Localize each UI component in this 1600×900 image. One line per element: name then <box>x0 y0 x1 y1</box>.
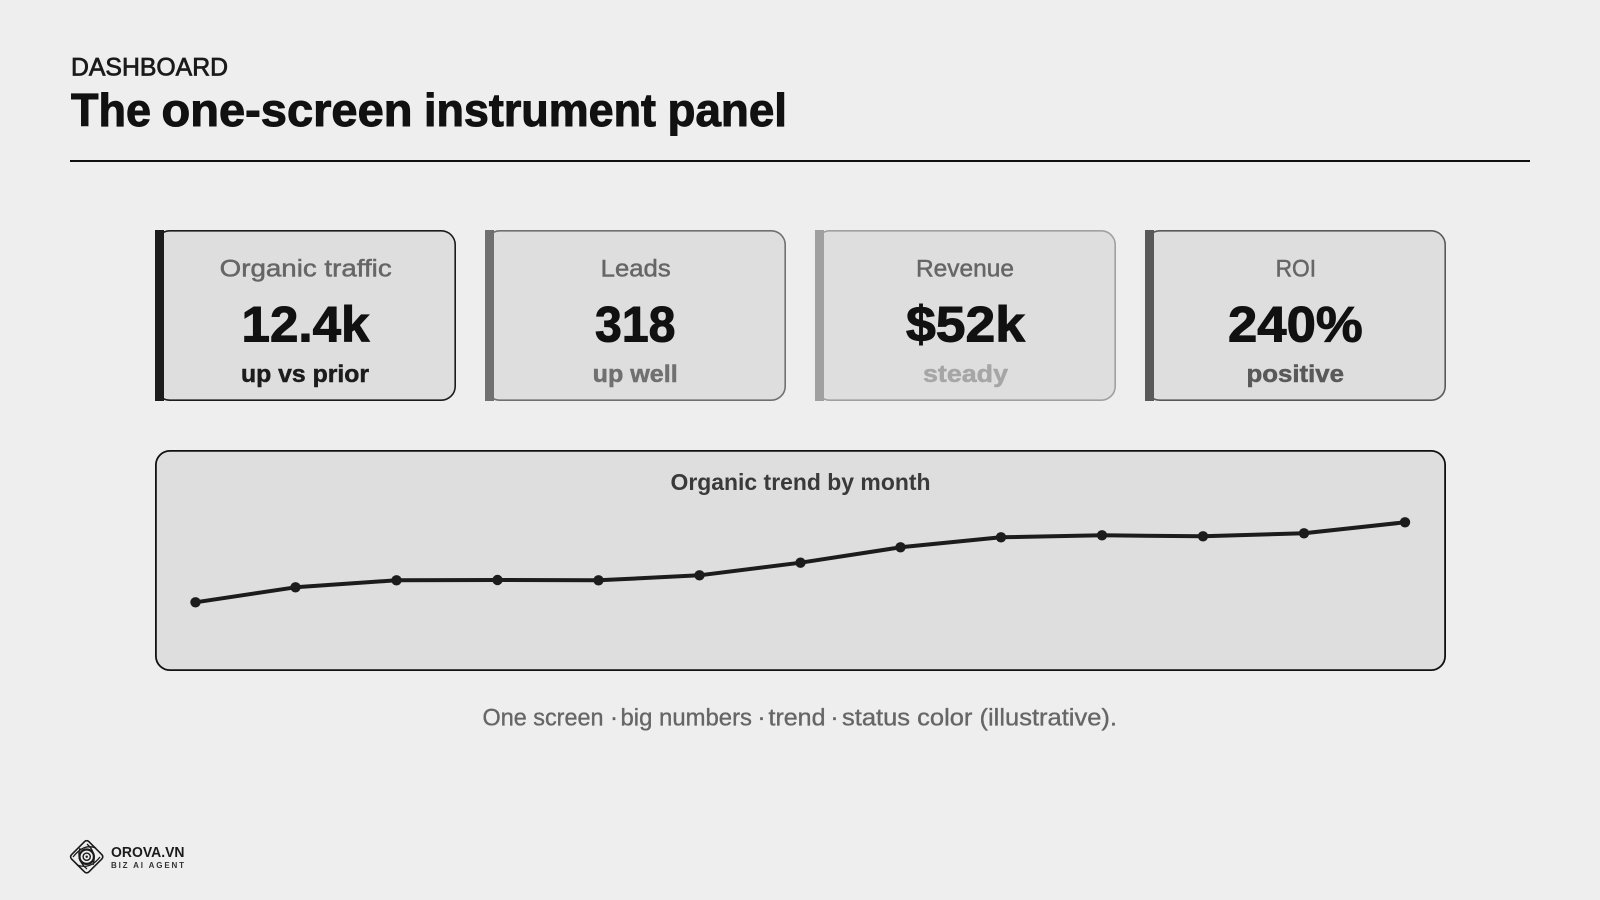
caption: big numbers <box>620 705 752 732</box>
panel: ROI KPI card <box>1145 230 1445 401</box>
logo wordmark: OROVA.VN <box>111 845 184 861</box>
panel: revenue KPI card <box>815 230 1115 401</box>
title: The <box>71 84 151 136</box>
status: positive: positive <box>1246 361 1344 388</box>
title: instrument <box>424 84 656 136</box>
header <box>71 54 787 136</box>
caption: · <box>830 705 838 732</box>
title <box>71 84 787 136</box>
value: 318: 318 <box>595 297 676 353</box>
logo: OROVA.VN <box>69 839 184 874</box>
caption: trend <box>768 705 826 732</box>
caption: · <box>610 705 618 732</box>
chart title: Organic trend by month <box>670 469 930 495</box>
panel: leads KPI card <box>485 230 785 401</box>
label: organic traffic: Organic traffic <box>220 256 392 283</box>
panel: organic traffic KPI card <box>155 230 455 401</box>
status: up vs prior: up vs prior <box>241 361 369 388</box>
value: $52k: $52k <box>906 297 1025 353</box>
title: one-screen <box>162 84 412 136</box>
panel: organic trend chart <box>156 451 1445 670</box>
status: up well: up well <box>593 361 678 388</box>
label: revenue: Revenue <box>916 256 1014 283</box>
status bar: ROI <box>1145 230 1154 401</box>
eyebrow label: DASHBOARD <box>71 54 228 82</box>
status: steady: steady <box>923 361 1008 388</box>
value: 12.4k: 12.4k <box>242 297 370 353</box>
status bar: organic traffic <box>155 230 164 401</box>
logo tagline: BIZ AI AGENT <box>111 861 184 870</box>
icon: swirl diamond <box>69 839 104 874</box>
caption: · <box>758 705 766 732</box>
status bar: revenue <box>815 230 824 401</box>
caption <box>482 705 1117 732</box>
status bar: leads <box>485 230 494 401</box>
line chart series <box>190 517 1410 608</box>
title: panel <box>668 84 787 136</box>
label: ROI: ROI <box>1276 256 1316 283</box>
label: leads: Leads <box>601 256 671 283</box>
value: 240%: 240% <box>1228 297 1363 353</box>
caption: One screen <box>482 705 604 732</box>
caption: status color (illustrative). <box>842 705 1117 732</box>
